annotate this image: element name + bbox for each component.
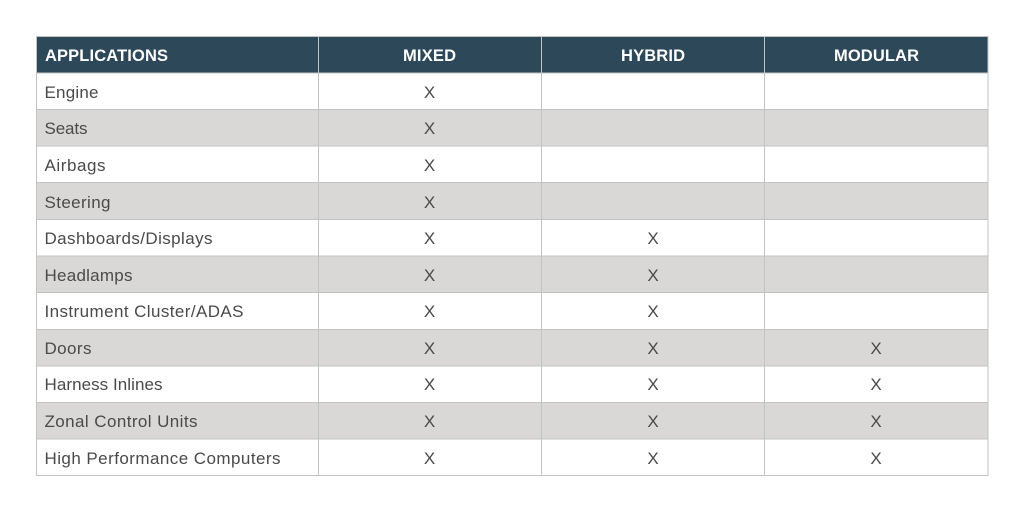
row: High Performance Computers: High Performance Computers bbox=[44, 449, 280, 468]
row: Headlamps: X bbox=[647, 266, 659, 285]
row: Doors: Doors bbox=[44, 339, 92, 358]
header row: APPLICATIONS bbox=[45, 47, 168, 65]
header row: MODULAR bbox=[834, 47, 919, 65]
row: Dashboards/Displays: X bbox=[424, 229, 435, 248]
header row: HYBRID bbox=[621, 47, 685, 65]
row: High Performance Computers bbox=[44, 449, 882, 468]
row: Steering bbox=[44, 193, 435, 212]
row: Instrument Cluster/ADAS bbox=[44, 302, 659, 321]
row: Zonal Control Units: Zonal Control Units bbox=[44, 412, 198, 431]
row: Harness Inlines: Harness Inlines bbox=[44, 375, 162, 394]
row: Doors: X bbox=[647, 339, 659, 358]
row: Engine bbox=[44, 83, 435, 102]
row: Harness Inlines bbox=[44, 375, 882, 394]
row: High Performance Computers: X bbox=[870, 449, 882, 468]
row: Steering: Steering bbox=[44, 193, 110, 212]
row: Dashboards/Displays bbox=[44, 229, 659, 248]
row: Instrument Cluster/ADAS: X bbox=[424, 302, 435, 321]
row: Zonal Control Units bbox=[44, 412, 882, 431]
row: Airbags: X bbox=[424, 156, 435, 175]
row: Seats: Seats bbox=[44, 119, 88, 138]
shaded row backgrounds bbox=[36, 110, 988, 439]
row: Instrument Cluster/ADAS: X bbox=[647, 302, 659, 321]
row: Headlamps: Headlamps bbox=[44, 266, 132, 285]
row: Harness Inlines: X bbox=[870, 375, 882, 394]
row: Engine: Engine bbox=[44, 83, 98, 102]
row: Zonal Control Units: X bbox=[647, 412, 659, 431]
row: Zonal Control Units: X bbox=[424, 412, 435, 431]
row: Steering: X bbox=[424, 193, 435, 212]
row: High Performance Computers: X bbox=[424, 449, 435, 468]
row: Airbags: Airbags bbox=[44, 156, 106, 175]
row: Engine: X bbox=[424, 83, 435, 102]
row: Headlamps bbox=[44, 266, 659, 285]
row: Seats: X bbox=[424, 119, 435, 138]
row: Doors: X bbox=[424, 339, 435, 358]
row: Headlamps: X bbox=[424, 266, 435, 285]
header row: MIXED bbox=[403, 47, 456, 65]
header row bbox=[36, 37, 988, 73]
row: Doors bbox=[44, 339, 882, 358]
row: Harness Inlines: X bbox=[424, 375, 435, 394]
row: Seats bbox=[44, 119, 435, 138]
grid lines bbox=[36, 36, 988, 476]
row: Instrument Cluster/ADAS: Instrument Cluster/ADAS bbox=[44, 302, 244, 321]
row: Harness Inlines: X bbox=[647, 375, 659, 394]
row: High Performance Computers: X bbox=[647, 449, 659, 468]
row: Dashboards/Displays: Dashboards/Displays bbox=[44, 229, 212, 248]
row: Zonal Control Units: X bbox=[870, 412, 882, 431]
row: Airbags bbox=[44, 156, 435, 175]
row: Dashboards/Displays: X bbox=[647, 229, 659, 248]
row: Doors: X bbox=[870, 339, 882, 358]
